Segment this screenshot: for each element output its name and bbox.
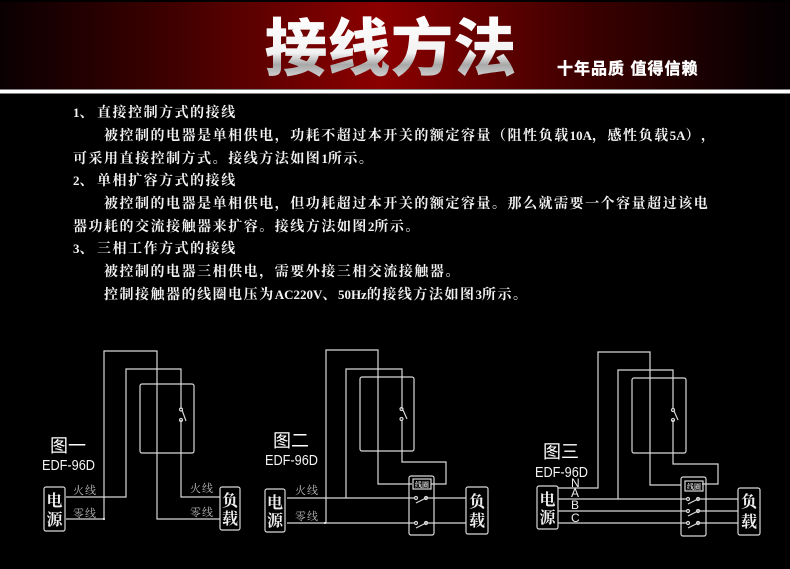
phase labels: N: [571, 476, 580, 490]
slogan: 十年品质 值得信赖: [557, 59, 698, 78]
source box: 源: [267, 512, 284, 530]
contactor: 线圈: [687, 482, 701, 491]
source box: 电: [267, 494, 283, 512]
instructions text block: 被控制的电器三相供电，需要外接三相交流接触器。: [104, 261, 461, 281]
header banner: [0, 2, 790, 94]
instructions text block: 可采用直接控制方式。接线方法如图1所示。: [73, 148, 374, 168]
figure label: 图二: [273, 431, 309, 451]
wire labels: [295, 483, 319, 523]
instructions text block: 器功耗的交流接触器来扩容。接线方法如图2所示。: [73, 216, 421, 236]
wire labels: 零线: [190, 505, 214, 519]
load box: [738, 488, 760, 535]
source box: 源: [540, 509, 556, 527]
instructions text block: [73, 102, 717, 304]
instructions text block: 2、单相扩容方式的接线: [73, 170, 237, 190]
wire labels: 火线: [190, 481, 214, 495]
instructions text block: 3、三相工作方式的接线: [73, 238, 237, 258]
load box: 载: [222, 510, 239, 528]
source box: [265, 489, 285, 532]
diagram 1: [42, 351, 240, 531]
figure label: 图一: [50, 436, 86, 456]
load box: 负: [222, 491, 239, 510]
diagram 3: [535, 352, 760, 536]
icon: switch: [180, 408, 186, 422]
figure label: EDF-96D: [265, 453, 318, 469]
source box: 电: [540, 491, 556, 509]
load box: 载: [741, 513, 758, 531]
contactor: [409, 476, 434, 535]
contactor: 线圈: [415, 480, 429, 489]
instructions text block: 被控制的电器是单相供电，但功耗超过本开关的额定容量。那么就需要一个容量超过该电: [104, 193, 709, 213]
instructions text block: 被控制的电器是单相供电，功耗不超过本开关的额定容量（阻性负载10A，感性负载5A） ，: [104, 125, 717, 145]
figure label: EDF-96D: [535, 465, 588, 481]
source box: [537, 486, 558, 529]
icon: switch: [672, 408, 678, 422]
phase labels: A: [571, 486, 579, 500]
contactor: [681, 477, 706, 536]
load box: [220, 487, 240, 530]
source box: 电: [46, 492, 63, 510]
source box: [44, 487, 65, 531]
instructions text block: 1、直接控制方式的接线: [73, 102, 237, 122]
figure label: EDF-96D: [42, 458, 95, 474]
wire labels: [73, 481, 214, 520]
load box: 载: [469, 512, 486, 530]
icon: switch: [400, 408, 407, 420]
load box: 负: [741, 492, 758, 511]
load box: 负: [469, 492, 486, 511]
wire labels: 零线: [73, 506, 97, 520]
figure label: [535, 442, 588, 481]
title: 接线方法: [265, 15, 517, 84]
phase labels: C: [571, 511, 580, 525]
figure label: [42, 436, 95, 474]
wire labels: 火线: [295, 483, 319, 497]
instructions text block: 控制接触器的线圈电压为AC220V、50Hz的接线方法如图3所示。: [104, 284, 529, 304]
wire labels: 零线: [295, 509, 319, 523]
wire labels: 火线: [73, 483, 97, 497]
diagram 2: [265, 350, 488, 535]
source box: 源: [46, 511, 64, 529]
load box: [466, 487, 488, 534]
figure label: 图三: [543, 442, 579, 462]
phase labels: [571, 476, 580, 525]
figure label: [265, 431, 318, 469]
phase labels: B: [571, 498, 579, 512]
